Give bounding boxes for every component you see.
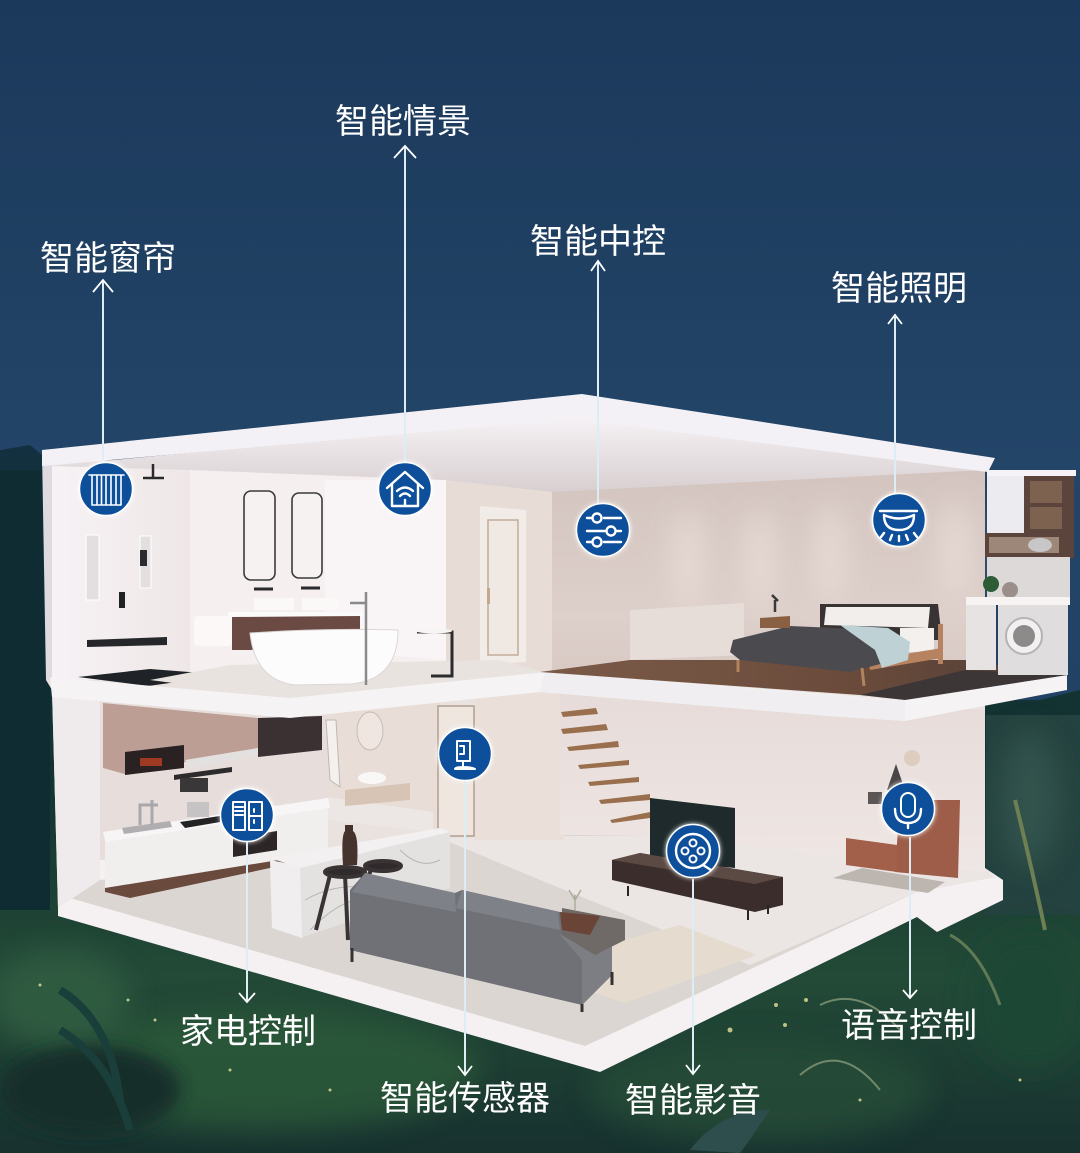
roof slab xyxy=(42,394,995,472)
house backing xyxy=(46,460,1003,1050)
half wall xyxy=(630,603,744,660)
ground floor floor and slab xyxy=(58,835,1003,1072)
ceiling xyxy=(52,415,985,492)
house model xyxy=(42,394,1076,1072)
label: 智能传感器: 智能传感器 xyxy=(380,1080,550,1118)
arrow down xyxy=(903,837,917,998)
callout: 智能影音 xyxy=(625,824,761,1120)
icon: sensor xyxy=(438,728,492,780)
arrow up xyxy=(93,280,113,466)
TV console xyxy=(612,853,783,920)
jungle backdrop xyxy=(0,445,1080,1153)
icon: smart home wifi xyxy=(378,462,432,516)
corridor door xyxy=(480,506,526,665)
callout: 智能照明 xyxy=(831,270,967,546)
label: 智能窗帘: 智能窗帘 xyxy=(40,240,176,278)
label: 智能影音: 智能影音 xyxy=(625,1082,761,1120)
label: 智能照明: 智能照明 xyxy=(831,270,967,308)
icon: microphone xyxy=(882,782,934,836)
arrow up xyxy=(591,261,605,504)
arrow down xyxy=(458,781,472,1075)
arrow up xyxy=(394,146,416,463)
callout: 智能窗帘 xyxy=(40,240,176,516)
arrow down xyxy=(239,842,255,1002)
bed xyxy=(730,595,943,686)
callout: 家电控制 xyxy=(180,788,316,1051)
bar stools xyxy=(316,861,401,940)
upper floor walls xyxy=(42,452,985,680)
icon: appliances xyxy=(220,788,274,842)
callout: 智能传感器 xyxy=(380,728,550,1118)
callout: 语音控制 xyxy=(841,782,977,1045)
label: 智能中控: 智能中控 xyxy=(530,223,666,261)
side table xyxy=(560,890,625,955)
label: 家电控制: 家电控制 xyxy=(180,1013,316,1051)
icon: curtain xyxy=(80,462,132,516)
label: 智能情景: 智能情景 xyxy=(335,103,471,141)
television xyxy=(650,798,735,868)
label: 语音控制: 语音控制 xyxy=(841,1007,977,1045)
upper floor slab xyxy=(50,660,1067,721)
bathroom xyxy=(78,464,543,698)
icon: sliders xyxy=(576,504,630,556)
wall spotlights xyxy=(674,500,969,610)
callout: 智能中控 xyxy=(530,223,666,556)
staircase xyxy=(561,708,650,823)
arrow down xyxy=(686,879,700,1074)
kitchen island xyxy=(270,825,450,938)
ground floor walls xyxy=(52,690,985,908)
foyer furniture xyxy=(833,750,960,893)
callout: 智能情景 xyxy=(335,103,471,516)
icon: film reel xyxy=(666,824,720,878)
laundry unit xyxy=(966,470,1076,675)
arrow up xyxy=(888,315,902,493)
icon: ceiling light xyxy=(872,494,926,546)
sofa xyxy=(350,873,612,1012)
rug xyxy=(585,925,757,1003)
kitchen xyxy=(103,703,410,898)
